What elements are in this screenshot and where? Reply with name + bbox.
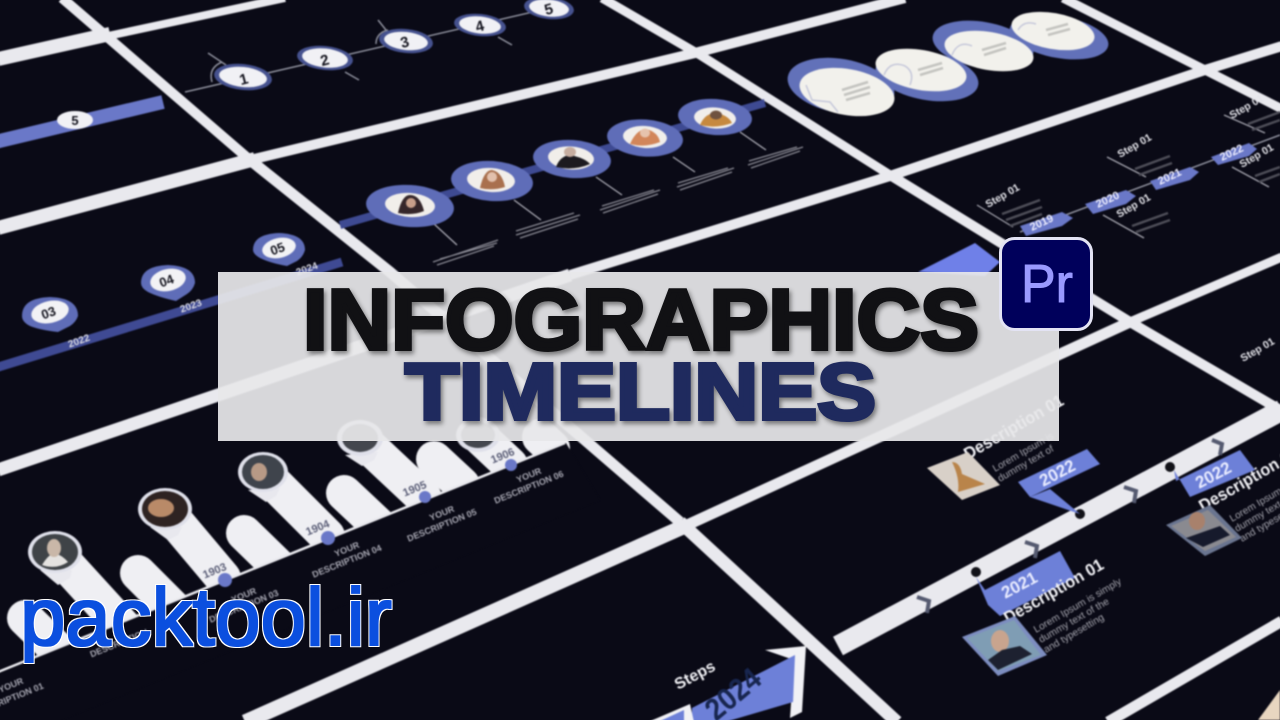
slide: pill bar chart: DESCRIPTION 06 xyxy=(493,469,565,506)
slide: step timeline: Step 01 xyxy=(1116,131,1154,161)
slide: chevron timeline: Description 01 xyxy=(1000,555,1107,627)
slide: step timeline: Step 01 xyxy=(984,181,1022,211)
slide: chevron timeline xyxy=(838,391,1280,720)
slide: chevron timeline: Description 01 xyxy=(960,391,1067,463)
slide: pill bar chart xyxy=(0,418,600,720)
slide: map pin timeline: 2023 xyxy=(179,298,204,316)
slide: step timeline: Step 01 xyxy=(1238,335,1277,365)
slide: numbered circles timeline xyxy=(185,0,575,93)
slide: pill bar chart: 1903 xyxy=(201,561,228,581)
slide: chevron timeline: and typesetting xyxy=(1042,612,1106,656)
slide: step timeline: Step 01 xyxy=(1228,92,1266,122)
photo cards xyxy=(927,452,1280,720)
watermark: packtool.ir xyxy=(20,572,392,663)
slide: step timeline: 2019 xyxy=(1028,212,1055,234)
slide: pill bar chart: 1905 xyxy=(401,479,428,499)
slide: chevron timeline: Lorem Ipsum is simply xyxy=(1032,576,1124,636)
slide: map pin timeline: 2024 xyxy=(295,261,320,279)
title banner xyxy=(218,272,1059,441)
slide: pill bar chart: 1904 xyxy=(304,518,332,538)
slide: numbered circles timeline: 3 xyxy=(399,33,411,52)
slide: chevron timeline: dummy text of the xyxy=(1037,596,1112,646)
avatar photos xyxy=(398,110,732,214)
slide: numbered circles timeline: 5 xyxy=(543,0,555,19)
slide: pill bar chart: YOUR xyxy=(230,586,258,605)
slide: chevron timeline: 2022 xyxy=(1036,456,1079,490)
slide: map pin timeline: 05 xyxy=(268,239,287,258)
slide: step timeline: Step 01 xyxy=(1238,141,1276,171)
slide: chevron timeline: 2022 xyxy=(1192,458,1235,492)
slide: pill bar chart: DESCRIPTION 05 xyxy=(406,507,478,544)
slide: map pin timeline xyxy=(0,233,342,368)
icon: premiere pro xyxy=(1000,238,1092,330)
icon: premiere pro: Pr xyxy=(1021,254,1073,314)
slide: step timeline: 2022 xyxy=(1218,142,1245,164)
slide: step timeline: Step 01 xyxy=(1114,191,1153,221)
slide: blue tab behind banner xyxy=(918,243,1000,276)
slide: chevron timeline: Lorem Ipsum is xyxy=(991,431,1056,475)
chart pin avatars xyxy=(28,418,517,587)
slide: pill bar chart: DESCRIPTION 03 xyxy=(208,588,280,625)
slide: big white ovals xyxy=(783,6,1112,123)
slide: step timeline xyxy=(977,92,1280,365)
slide: pill bar chart: YOUR xyxy=(515,466,543,485)
slide: numbered circles timeline: 1 xyxy=(238,70,250,89)
slide: pill bar chart: YOUR xyxy=(333,540,361,559)
slide: step timeline: 2021 xyxy=(1156,166,1183,188)
slide: pill bar chart: 1906 xyxy=(489,446,516,466)
slide: map pin timeline: 2022 xyxy=(67,333,92,351)
slide: chevron timeline: 2021 xyxy=(998,568,1041,602)
slide: step timeline: 2020 xyxy=(1094,189,1121,211)
slide: numbered circles timeline: 4 xyxy=(474,17,487,36)
slide: pill bar chart: DESCRIPTION 04 xyxy=(311,543,383,580)
slide: numbered circles timeline: 2 xyxy=(319,51,331,70)
slide: pill bar chart: YOUR xyxy=(428,504,456,523)
slide: left banner strip: 5 xyxy=(71,113,79,128)
title line: infographics: INFOGRAPHICS xyxy=(303,273,979,368)
slide: map pin timeline: 03 xyxy=(39,303,58,322)
title line: timelines: TIMELINES xyxy=(405,347,876,436)
slide: arrow steps: Steps xyxy=(672,658,718,694)
slide: arrow steps xyxy=(648,646,806,720)
slide: avatar timeline xyxy=(340,96,803,265)
slide: left banner strip xyxy=(0,102,163,142)
slide: chevron timeline: dummy text of xyxy=(996,444,1056,485)
slide: map pin timeline: 04 xyxy=(157,271,177,290)
slide: pill bar chart: DESCRIPTION xyxy=(88,627,149,659)
